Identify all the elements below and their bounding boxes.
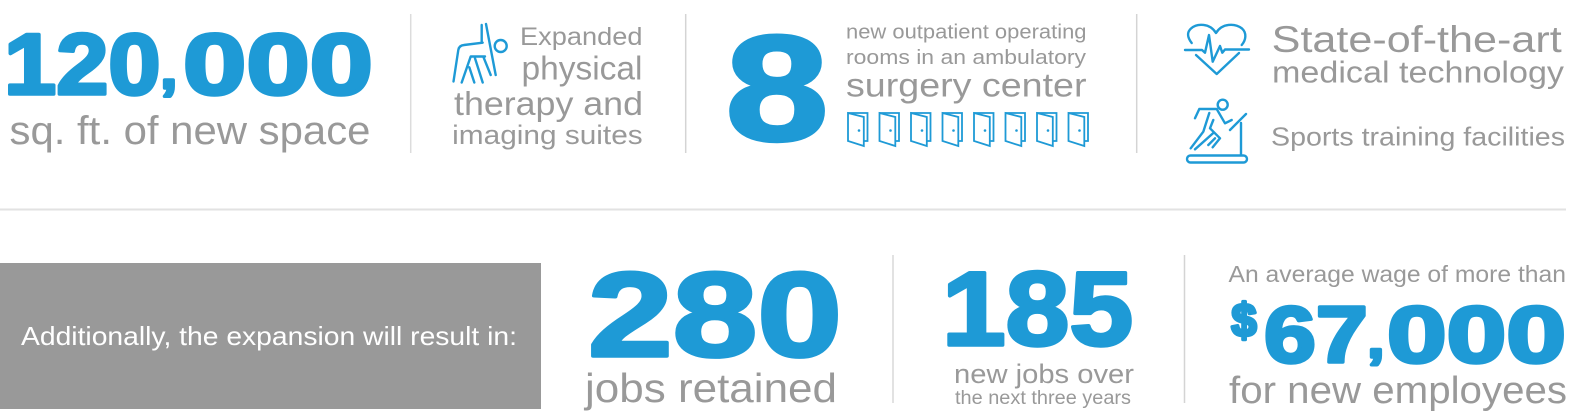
text: operating rooms — [846, 21, 1086, 103]
stat: 185 jobs: new jobs over — [954, 359, 1134, 389]
stat: 8: 8 — [726, 4, 828, 172]
stat: average wage: An average wage of more than — [1228, 261, 1566, 287]
panel: additionally: Additionally, the expansion will result in: — [21, 321, 517, 351]
text: operating rooms: rooms in an ambulatory — [846, 47, 1086, 69]
text: expanded physical therapy and imaging suites: Expanded — [520, 23, 642, 51]
stat: average wage — [1228, 261, 1567, 412]
stat: 280 jobs — [584, 248, 842, 411]
panel: additionally — [0, 263, 541, 409]
icon: physical therapy — [454, 24, 507, 82]
stat: 280 jobs: jobs retained — [584, 365, 837, 411]
text: medical technology: medical technology — [1272, 54, 1565, 90]
text: operating rooms: surgery center — [846, 66, 1086, 104]
stat: 185 jobs — [942, 251, 1134, 409]
text: operating rooms: new outpatient operating — [846, 21, 1086, 43]
stat: 280 jobs: 280 — [588, 248, 842, 382]
icon: treadmill runner — [1187, 100, 1247, 162]
text: expanded physical therapy and imaging suites — [452, 23, 643, 150]
stat: average wage: for new employees — [1229, 370, 1567, 412]
stat: 120,000 sq. ft. — [4, 17, 373, 153]
text: medical technology: State-of-the-art — [1272, 19, 1563, 60]
text: expanded physical therapy and imaging suites: therapy and — [454, 85, 643, 122]
text: medical technology — [1272, 19, 1565, 90]
text: expanded physical therapy and imaging suites: physical — [522, 50, 642, 86]
stat: 120,000 sq. ft.: sq. ft. of new space — [10, 109, 370, 153]
stat: average wage: 000 — [1387, 290, 1566, 379]
stat: 185 jobs: the next three years — [955, 388, 1131, 409]
icon: eight doors — [848, 113, 1088, 146]
icon: heart with pulse — [1185, 25, 1249, 74]
text: expanded physical therapy and imaging suites: imaging suites — [452, 120, 643, 150]
stat: 185 jobs: 185 — [942, 251, 1133, 368]
stat: average wage: , — [1368, 312, 1384, 368]
stat: 120,000 sq. ft.: 120 — [4, 17, 148, 113]
stat: average wage: 67 — [1264, 290, 1353, 379]
stat: 120,000 sq. ft.: , — [161, 40, 177, 100]
stat: 120,000 sq. ft.: 000 — [183, 17, 373, 113]
stat: average wage: $ — [1232, 294, 1256, 346]
text: sports training: Sports training facilities — [1271, 122, 1565, 152]
